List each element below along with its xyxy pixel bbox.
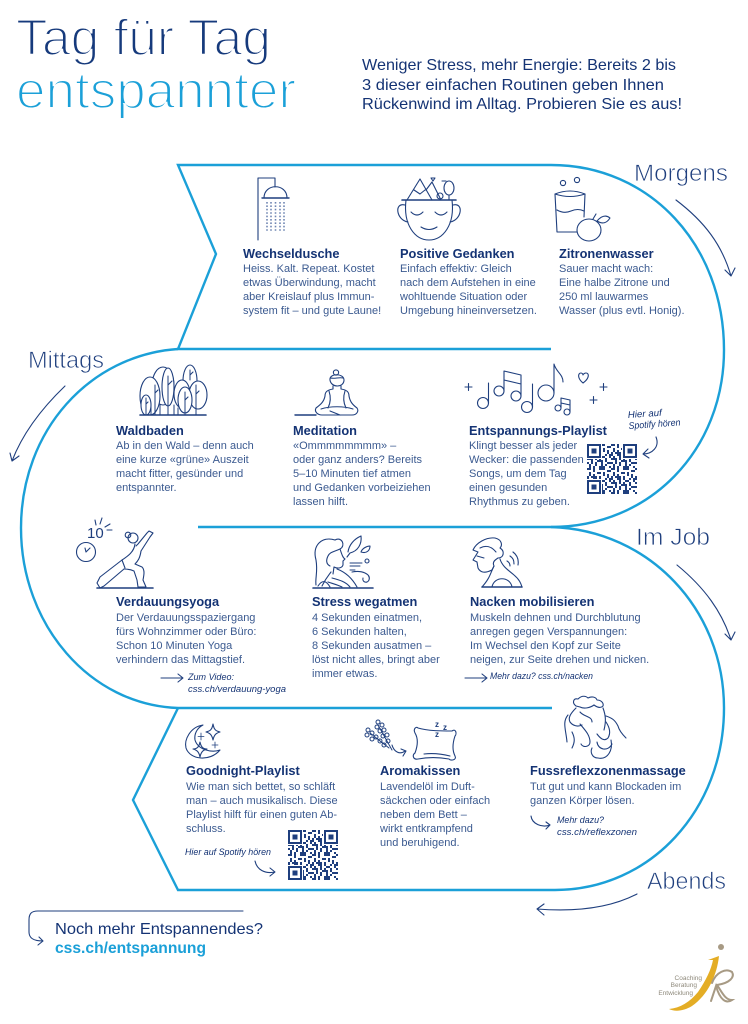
- body text: Lavendelöl im Duft-: [380, 781, 475, 793]
- icon: yoga with clock: [76, 518, 153, 588]
- label: Im Job: Im Job: [636, 524, 710, 551]
- body text: wohltuende Situation oder: [399, 291, 528, 303]
- body text: Tut gut und kann Blockaden im: [530, 781, 681, 793]
- body text: ganzen Körper lösen.: [530, 795, 635, 807]
- arrow: link: [531, 816, 550, 829]
- arrow: link: [465, 674, 487, 682]
- handwritten note: [627, 406, 681, 432]
- handwritten link: [187, 672, 286, 695]
- heading: Verdauungsyoga: [116, 594, 220, 609]
- intro text: [362, 57, 682, 113]
- heading: Stress wegatmen: [312, 594, 417, 609]
- title: Tag für Tag: [16, 9, 271, 66]
- title: entspannter: [16, 62, 296, 120]
- body text: Umgebung hineinversetzen.: [400, 305, 537, 317]
- handwritten link: css.ch/verdauung-yoga: [188, 684, 286, 695]
- panel: Nacken mobilisieren: [465, 538, 649, 682]
- body text: Wasser (plus evtl. Honig).: [559, 305, 685, 317]
- body text: Playlist hilft für einen guten Ab-: [186, 809, 337, 821]
- heading: Goodnight-Playlist: [186, 763, 300, 778]
- body text: 8 Sekunden ausatmen –: [312, 640, 432, 652]
- panel: Wechseldusche: [243, 178, 381, 317]
- logo: Coaching: [675, 975, 702, 982]
- body text: macht fitter, gesünder und: [116, 468, 243, 480]
- footer text: css.ch/entspannung: [55, 940, 206, 957]
- icon: breathing head: [313, 536, 373, 588]
- label: Abends: Abends: [647, 868, 726, 895]
- intro text: Rückenwind im Alltag. Probieren Sie es aus!: [362, 96, 682, 113]
- body text: und Gedanken vorbeiziehen: [293, 482, 431, 494]
- logo: Entwicklung: [658, 990, 693, 997]
- body text: und beruhigend.: [380, 837, 460, 849]
- body text: schluss.: [186, 823, 226, 835]
- body text: Ab in den Wald – denn auch: [116, 440, 254, 452]
- footer text: [55, 921, 263, 957]
- body text: Heiss. Kalt. Repeat. Kostet: [243, 263, 374, 275]
- body text: wirkt entkrampfend: [379, 823, 473, 835]
- body text: eine kurze «grüne» Auszeit: [116, 454, 249, 466]
- QR code: [586, 443, 638, 495]
- arrow: note to QR: [643, 437, 657, 458]
- icon: neck: [473, 538, 522, 587]
- body text: immer etwas.: [312, 668, 377, 680]
- intro text: 3 dieser einfachen Routinen geben Ihnen: [362, 77, 664, 94]
- handwritten link: [557, 815, 637, 838]
- arrow: Abends: [537, 894, 637, 915]
- body text: verhindern das Mittagstief.: [116, 654, 245, 666]
- body text: löst nicht alles, bringt aber: [312, 654, 440, 666]
- panel: Entspannungs-Playlist: [465, 364, 681, 508]
- title: [16, 9, 296, 120]
- body text: säckchen oder einfach: [380, 795, 490, 807]
- arrow: Morgens: [676, 200, 735, 276]
- body text: Im Wechsel den Kopf zur Seite: [470, 640, 621, 652]
- heading: Meditation: [293, 423, 357, 438]
- panel: Meditation: [293, 370, 431, 508]
- body text: oder ganz anders? Bereits: [293, 454, 423, 466]
- handwritten link: Mehr dazu? css.ch/nacken: [490, 671, 593, 682]
- body text: etwas Überwindung, macht: [243, 277, 376, 289]
- body text: Eine halbe Zitrone und: [559, 277, 670, 289]
- body text: fürs Wohnzimmer oder Büro:: [116, 626, 256, 638]
- body text: system fit – und gute Laune!: [243, 305, 381, 317]
- icon: meditating person: [295, 370, 358, 415]
- body text: 4 Sekunden einatmen,: [312, 612, 422, 624]
- ribbon path: [21, 165, 724, 890]
- body text: «Ommmmmmmm» –: [293, 440, 397, 452]
- body text: neigen, zur Seite drehen und nicken.: [470, 654, 649, 666]
- body text: anregen gegen Verspannungen:: [470, 626, 627, 638]
- icon: lavender and pillow: z: [435, 720, 439, 729]
- logo: Beratung: [671, 982, 697, 989]
- panel: Fussreflexzonenmassage: [530, 696, 686, 838]
- footer text: Noch mehr Entspannendes?: [55, 921, 263, 938]
- body text: Wecker: die passenden: [469, 454, 584, 466]
- label: Mittags: Mittags: [28, 347, 104, 374]
- body text: Der Verdauungsspaziergang: [116, 612, 255, 624]
- body text: nach dem Aufstehen in eine: [400, 277, 536, 289]
- heading: Waldbaden: [116, 423, 184, 438]
- icon: music notes: [465, 364, 607, 415]
- body text: Schon 10 Minuten Yoga: [116, 640, 233, 652]
- logo: [658, 944, 733, 1011]
- arrow: Mittags: [10, 386, 65, 461]
- handwritten note: Spotify hören: [628, 417, 681, 432]
- body text: Rhythmus zu geben.: [469, 496, 570, 508]
- icon: lavender and pillow: z: [443, 723, 447, 732]
- body text: Klingt besser als jeder: [469, 440, 578, 452]
- handwritten link: css.ch/reflexzonen: [557, 827, 637, 838]
- body text: 5–10 Minuten tief atmen: [293, 468, 411, 480]
- panel: Positive Gedanken: [398, 178, 537, 317]
- panel: Aromakissen: [365, 720, 490, 849]
- QR code: [287, 829, 339, 881]
- body text: Songs, um dem Tag: [469, 468, 567, 480]
- body text: Einfach effektiv: Gleich: [400, 263, 512, 275]
- body text: man – auch musikalisch. Diese: [186, 795, 338, 807]
- handwritten link: Mehr dazu?: [557, 815, 605, 826]
- icon: lavender and pillow: z: [435, 730, 439, 739]
- heading: Aromakissen: [380, 763, 461, 778]
- heading: Zitronenwasser: [559, 246, 654, 261]
- intro text: Weniger Stress, mehr Energie: Bereits 2 bis: [362, 57, 676, 74]
- arrow: note to QR: [255, 861, 275, 876]
- panel: Verdauungsyoga: [76, 518, 286, 695]
- heading: Wechseldusche: [243, 246, 340, 261]
- icon: lavender and pillow: [365, 720, 456, 760]
- body text: aber Kreislauf plus Immun-: [243, 291, 375, 303]
- bracket arrow: footer: [29, 911, 243, 945]
- icon: foot massage: [565, 696, 626, 758]
- body text: 6 Sekunden halten,: [312, 626, 407, 638]
- body text: 250 ml lauwarmes: [559, 291, 649, 303]
- icon: yoga with clock: 10: [87, 525, 104, 542]
- icon: moon and stars: [186, 724, 220, 758]
- icon: glass and lemon: [555, 177, 610, 241]
- arrow: Im Job: [677, 565, 735, 640]
- body text: entspannter.: [116, 482, 177, 494]
- body text: einen gesunden: [469, 482, 547, 494]
- heading: Fussreflexzonenmassage: [530, 763, 686, 778]
- heading: Positive Gedanken: [400, 246, 515, 261]
- panel: Stress wegatmen: [312, 536, 440, 680]
- body text: Sauer macht wach:: [559, 263, 653, 275]
- icon: shower: [258, 178, 289, 240]
- panel: Goodnight-Playlist: [185, 724, 339, 881]
- handwritten link: Zum Video:: [187, 672, 234, 683]
- body text: neben dem Bett –: [380, 809, 468, 821]
- icon: head with mountains: [398, 178, 460, 240]
- body text: lassen hilft.: [293, 496, 348, 508]
- handwritten note: Hier auf: [627, 408, 664, 421]
- handwritten note: Hier auf Spotify hören: [185, 847, 271, 858]
- panel: Waldbaden: [116, 365, 254, 494]
- label: Morgens: Morgens: [634, 160, 728, 187]
- body text: Muskeln dehnen und Durchblutung: [470, 612, 641, 624]
- heading: Nacken mobilisieren: [470, 594, 595, 609]
- heading: Entspannungs-Playlist: [469, 423, 608, 438]
- body text: Wie man sich bettet, so schläft: [186, 781, 335, 793]
- icon: trees: [140, 365, 207, 415]
- panel: Zitronenwasser: [555, 177, 685, 317]
- arrow: link: [161, 674, 183, 682]
